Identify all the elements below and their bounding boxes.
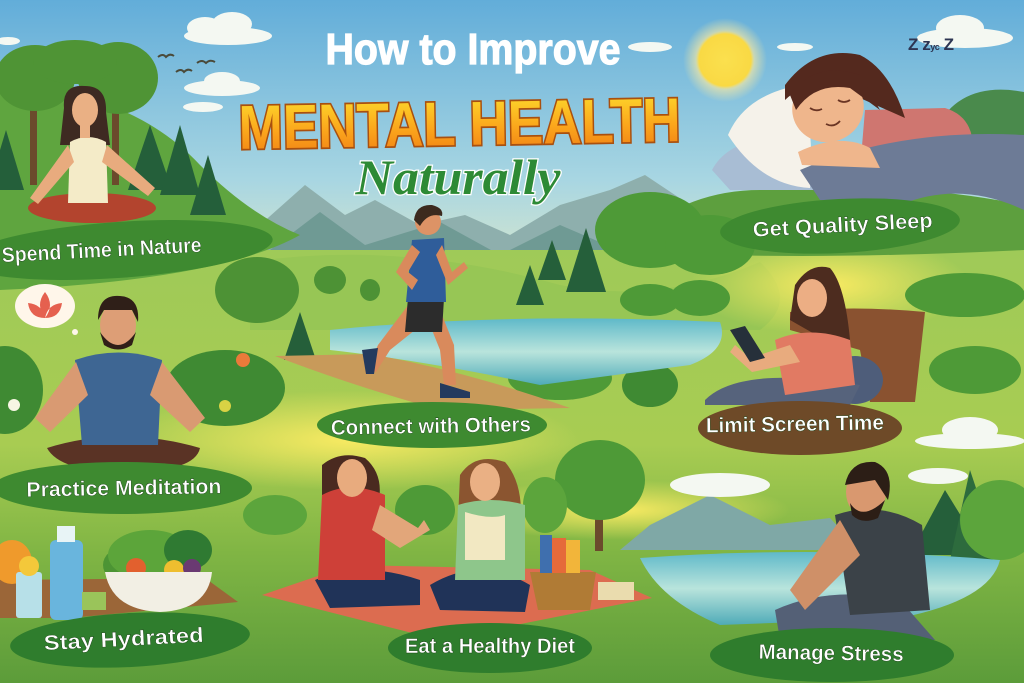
- clouds: [0, 12, 1013, 112]
- picnic blanket: [262, 565, 652, 640]
- title: how to improve: How to Improve: [326, 25, 620, 74]
- title: mental health: MENTAL HEALTH: [238, 86, 681, 163]
- runner: [362, 205, 470, 398]
- person: nature meditation woman: [28, 86, 156, 223]
- label: stay hydrated: Stay Hydrated: [43, 624, 204, 655]
- label: practice meditation: [0, 462, 252, 514]
- stone path: [275, 354, 570, 410]
- main meadow: [0, 250, 1024, 683]
- label: eat a healthy diet: Eat a Healthy Diet: [405, 635, 575, 658]
- people: two women on picnic: [315, 455, 530, 612]
- label: practice meditation: Practice Meditation: [26, 475, 222, 502]
- label: limit screen time: Limit Screen Time: [706, 411, 884, 438]
- label: connect with others: [317, 402, 547, 448]
- hill: right: [620, 187, 1024, 256]
- label: spend time in nature: Spend Time in Nature: [1, 234, 202, 267]
- label: manage stress: Manage Stress: [758, 641, 904, 666]
- label: connect with others: Connect with Others: [331, 413, 531, 440]
- bush with flowers: [0, 346, 285, 434]
- person: sleeping woman: [712, 53, 1024, 210]
- sun: [683, 18, 767, 102]
- label: get quality sleep: Get Quality Sleep: [752, 209, 933, 242]
- hill: top left: [0, 85, 300, 290]
- hydration table with water and fruit bowl: [0, 526, 238, 620]
- lake lower: [640, 552, 1000, 625]
- picnic basket: [530, 535, 634, 610]
- label: get quality sleep: [719, 193, 961, 259]
- background sky: [0, 0, 1024, 300]
- thought bubble: lotus: [15, 284, 78, 335]
- title: naturally: Naturally: [354, 149, 561, 205]
- mountains: [260, 175, 690, 300]
- person: man sitting: [775, 462, 935, 640]
- person: screen time woman with armchair: [705, 267, 925, 405]
- trees: [0, 40, 1024, 407]
- label: limit screen time: [698, 401, 902, 455]
- clouds lower right: [670, 417, 1024, 497]
- birds: [158, 55, 215, 72]
- label: spend time in nature: [0, 211, 275, 289]
- label: manage stress: [710, 628, 954, 682]
- sleep zzz: Z zyc Z: [908, 35, 954, 54]
- label: stay hydrated: [9, 607, 251, 673]
- trees and mountains centre-right: [243, 440, 1024, 560]
- label: eat a healthy diet: [388, 623, 592, 673]
- lake: [330, 318, 722, 385]
- person: meditating man: [35, 296, 205, 472]
